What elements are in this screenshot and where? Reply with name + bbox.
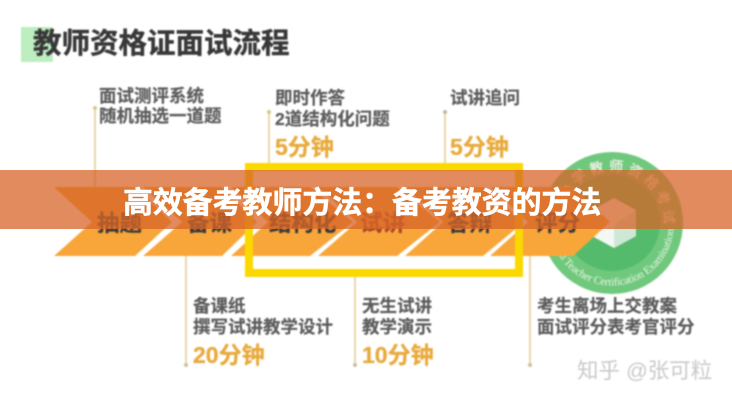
step note: lesson prep: 撰写试讲教学设计 (193, 317, 333, 337)
title: 教师资格证面试流程 (33, 28, 290, 60)
step note: draw question (99, 86, 222, 126)
step note: scoring: 考生离场上交教案 (537, 296, 677, 316)
step note: structured questions: 5分钟 (275, 134, 334, 160)
step note: teaching demo (362, 296, 434, 368)
banner headline: 高效备考教师方法：备考教资的方法 (123, 187, 601, 220)
step note: teaching demo: 教学演示 (362, 317, 432, 337)
step labels: 备课 (187, 211, 233, 236)
title accent block (21, 27, 53, 62)
step note: draw question: 随机抽选一道题 (99, 106, 222, 126)
step note: structured questions: 2道结构化问题 (275, 109, 390, 129)
step labels: 抽题 (97, 211, 142, 236)
step labels (97, 211, 580, 236)
step labels: 结构化 (269, 211, 337, 236)
step note: draw question: 面试测评系统 (99, 86, 204, 106)
step note: follow-up questions: 5分钟 (450, 134, 509, 160)
step note: lesson prep (193, 296, 333, 368)
certification badge: 小学教师资格考试 (560, 158, 676, 224)
yellow highlight frame (249, 167, 519, 273)
banner (0, 170, 732, 229)
certification badge (548, 151, 684, 295)
process arrow (54, 187, 610, 256)
step note: teaching demo: 10分钟 (362, 342, 434, 368)
certification badge: al Teacher Certification Examination (559, 229, 674, 286)
step note: follow-up questions: 试讲追问 (450, 88, 520, 108)
step labels: 试讲 (360, 211, 405, 236)
step labels: 答辩 (447, 211, 492, 236)
leader lines (93, 106, 532, 367)
step note: scoring (537, 296, 695, 337)
step note: teaching demo: 无生试讲 (362, 296, 432, 316)
step note: lesson prep: 20分钟 (193, 342, 265, 368)
step note: scoring: 面试评分表考官评分 (537, 317, 695, 337)
watermark: 知乎 @张可粒 (577, 359, 712, 383)
step note: lesson prep: 备课纸 (193, 296, 246, 316)
step labels: 评分 (535, 211, 580, 236)
step note: structured questions (275, 88, 390, 160)
step note: structured questions: 即时作答 (275, 88, 345, 108)
step note: follow-up questions (450, 88, 520, 160)
